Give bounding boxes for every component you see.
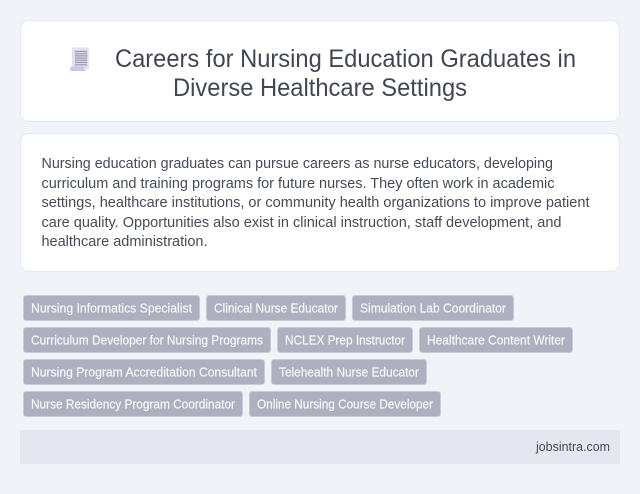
footer xyxy=(20,430,620,464)
title: Careers for Nursing Education Graduates in xyxy=(115,45,576,73)
description text xyxy=(42,155,590,250)
tag xyxy=(206,296,346,320)
tag xyxy=(24,360,264,384)
tag xyxy=(278,328,412,352)
tag: Telehealth Nurse Educator xyxy=(279,364,420,380)
description text: healthcare administration. xyxy=(42,233,208,250)
description text: care quality. Opportunities also exist in clinical instruction, staff development, and xyxy=(42,214,562,231)
tag: Online Nursing Course Developer xyxy=(257,396,434,412)
footer source text: jobsintra.com xyxy=(535,439,610,454)
tag xyxy=(24,296,200,320)
tag: Simulation Lab Coordinator xyxy=(360,300,507,316)
tag: Nurse Residency Program Coordinator xyxy=(31,396,236,412)
description text: Nursing education graduates can pursue careers as nurse educators, developing xyxy=(42,155,553,172)
description text: curriculum and training programs for future nurses. They often work in academic xyxy=(42,175,555,192)
tag: Clinical Nurse Educator xyxy=(214,300,339,316)
icon: document scroll xyxy=(70,48,89,71)
tag xyxy=(272,360,426,384)
tag: NCLEX Prep Instructor xyxy=(285,332,406,348)
tag xyxy=(352,296,514,320)
tag xyxy=(24,328,270,352)
tag: Healthcare Content Writer xyxy=(427,332,566,348)
tag: Nursing Informatics Specialist xyxy=(31,300,192,316)
tag group: related careers xyxy=(24,296,572,416)
description text: settings, healthcare institutions, or community health organizations to improve patient xyxy=(42,194,590,211)
title: Diverse Healthcare Settings xyxy=(173,74,467,102)
tag: Curriculum Developer for Nursing Programs xyxy=(31,332,263,348)
tag xyxy=(24,392,242,416)
title xyxy=(115,45,576,102)
tag: Nursing Program Accreditation Consultant xyxy=(31,364,257,380)
tag xyxy=(250,392,440,416)
panel: header xyxy=(20,20,620,122)
panel: description xyxy=(20,134,620,272)
tag xyxy=(420,328,572,352)
